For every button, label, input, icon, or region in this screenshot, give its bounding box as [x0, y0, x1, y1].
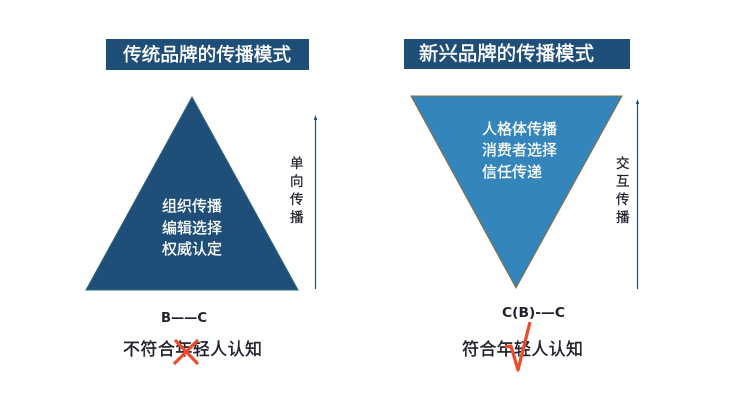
label: one-way spread: 向 [290, 170, 304, 190]
heading: traditional brands: 传统品牌的传播模式 [123, 40, 291, 67]
label: one-way spread: 传 [290, 188, 304, 208]
label: interactive spread: 互 [616, 170, 630, 190]
text: does not fit young perception: 不符合年轻人认知 [123, 335, 262, 360]
label: interactive spread [616, 152, 630, 226]
inverted triangle: emerging model [411, 96, 622, 288]
label: C(B) to C: C(B)-—C [502, 306, 565, 321]
inverted triangle: emerging model: 消费者选择 [482, 139, 557, 160]
arrow: interactive [636, 99, 639, 289]
triangle: traditional model [86, 97, 298, 290]
icon: red check [505, 322, 530, 370]
label: one-way spread [290, 152, 304, 226]
label: interactive spread: 交 [616, 152, 630, 172]
label: one-way spread: 单 [290, 152, 304, 172]
label: one-way spread: 播 [290, 206, 304, 226]
label: interactive spread: 播 [616, 206, 630, 226]
triangle: traditional model: 编辑选择 [162, 217, 222, 238]
label: B to C: B——C [161, 311, 207, 326]
text: fits young perception: 符合年轻人认知 [462, 335, 583, 360]
arrow: one-way [314, 115, 317, 289]
inverted triangle: emerging model: 人格体传播 [482, 118, 557, 139]
label: interactive spread: 传 [616, 188, 630, 208]
triangle: traditional model: 权威认定 [162, 238, 222, 259]
inverted triangle: emerging model: 信任传递 [482, 161, 542, 182]
triangle: traditional model: 组织传播 [162, 195, 222, 216]
heading: emerging brands: 新兴品牌的传播模式 [419, 37, 594, 66]
icon: red cross [174, 340, 198, 364]
